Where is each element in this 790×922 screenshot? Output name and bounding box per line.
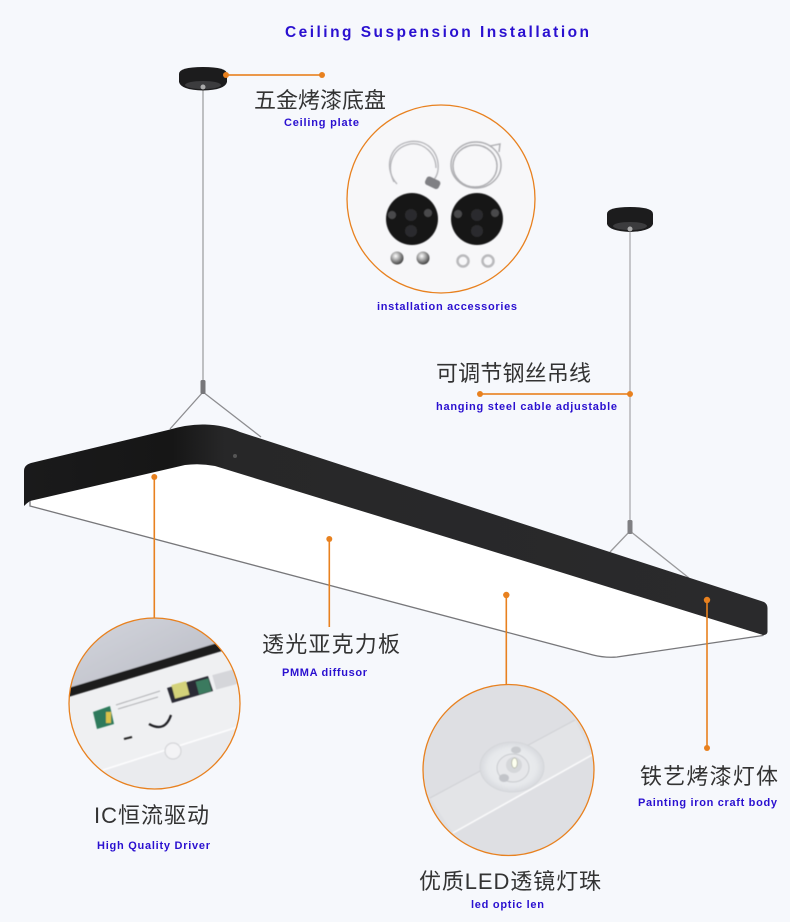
label: driver bbox=[94, 803, 211, 852]
wire ring left bbox=[389, 141, 438, 184]
black disc left bbox=[386, 193, 438, 245]
label: steel cable: hanging steel cable adjustable bbox=[436, 401, 617, 413]
lamp body bbox=[24, 424, 768, 657]
small green board bbox=[93, 706, 114, 729]
label: installation accessories: installation accessories bbox=[377, 301, 517, 313]
lamp diffuser panel bbox=[30, 460, 763, 657]
grey background above strip bbox=[71, 618, 215, 688]
label: steel cable bbox=[436, 361, 617, 413]
label: driver: IC恒流驱动 bbox=[94, 803, 209, 828]
LED strip board bbox=[430, 720, 592, 833]
label: LED lens bbox=[419, 869, 601, 911]
callout line: ceiling plate bbox=[223, 72, 325, 78]
callout line: diffusor bbox=[326, 536, 332, 627]
callout line: steel cable bbox=[477, 391, 633, 397]
keyhole bbox=[124, 737, 132, 739]
label: PMMA diffusor: 透光亚克力板 bbox=[262, 632, 400, 657]
label sticker text lines bbox=[116, 691, 160, 709]
label: driver: High Quality Driver bbox=[97, 840, 211, 852]
black strip bbox=[65, 643, 222, 698]
label: ceiling plate bbox=[254, 88, 386, 129]
label: LED lens: 优质LED透镜灯珠 bbox=[419, 869, 601, 894]
title: Ceiling Suspension Installation bbox=[285, 24, 589, 41]
left hanging cable bbox=[170, 90, 261, 437]
black disc right bbox=[451, 193, 503, 245]
label: painted body bbox=[638, 764, 778, 809]
terminal block bbox=[212, 669, 237, 690]
label: LED lens: led optic len bbox=[471, 899, 544, 911]
label: PMMA diffusor bbox=[262, 632, 400, 679]
label: PMMA diffusor: PMMA diffusor bbox=[282, 667, 368, 679]
wire ring right bbox=[451, 142, 501, 188]
right hanging cable bbox=[610, 232, 689, 578]
label: ceiling plate: 五金烤漆底盘 bbox=[254, 88, 386, 113]
callout line: LED bbox=[503, 592, 509, 686]
lens bbox=[480, 742, 544, 792]
LED lens bbox=[165, 743, 181, 759]
circle: installation accessories bbox=[347, 105, 535, 293]
label: ceiling plate: Ceiling plate bbox=[284, 117, 359, 129]
callout line: painted body bbox=[704, 597, 710, 751]
wire connector bbox=[424, 176, 441, 190]
label: steel cable: 可调节钢丝吊线 bbox=[436, 361, 591, 386]
hex nuts bbox=[458, 256, 494, 266]
frame screw bbox=[233, 454, 237, 458]
right ceiling plate bbox=[607, 207, 653, 232]
circle: LED lens detail bbox=[423, 684, 594, 856]
left ceiling plate bbox=[179, 67, 227, 90]
lower housing tray bbox=[103, 727, 245, 800]
transformer board bbox=[167, 676, 213, 703]
label: painted body: 铁艺烤漆灯体 bbox=[640, 764, 778, 789]
lamp black frame bbox=[24, 424, 768, 635]
circle: driver detail bbox=[68, 617, 241, 790]
callout line: driver bbox=[151, 474, 157, 619]
arc cut-out bbox=[149, 715, 171, 727]
label: painted body: Painting iron craft body bbox=[638, 797, 778, 809]
chrome balls bbox=[390, 252, 430, 264]
